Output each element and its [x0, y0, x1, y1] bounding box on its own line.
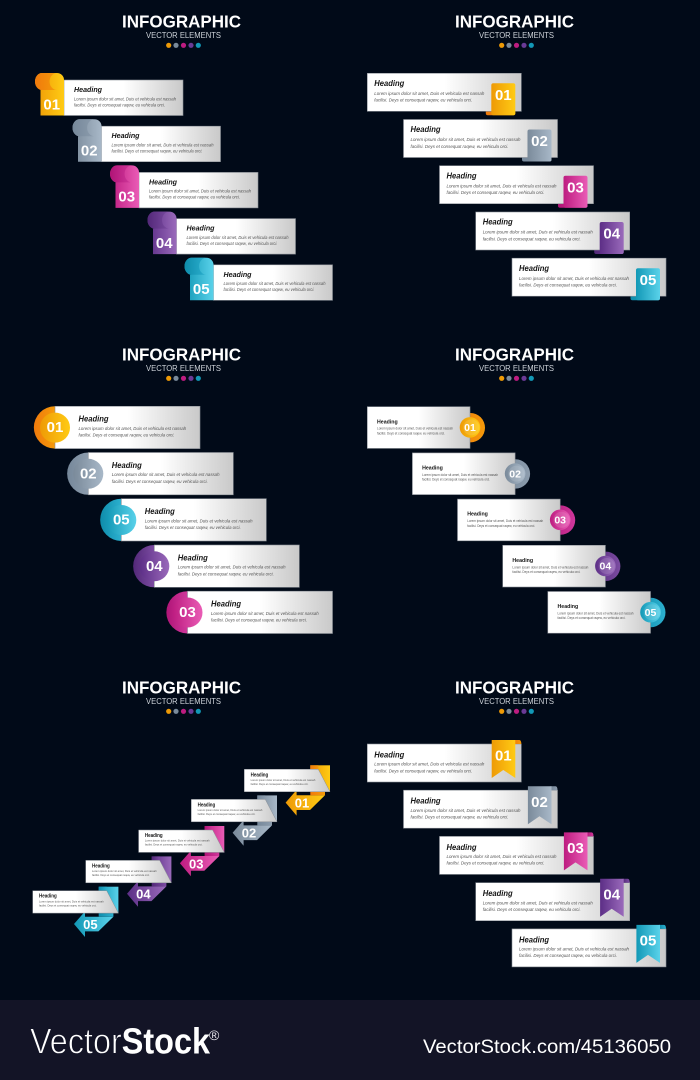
step 05: 05 — [640, 933, 656, 950]
step 05: 05 — [83, 917, 98, 932]
step 01: Lorem ipsum dolor sit amet, Duis et vehicula est nassah — [78, 426, 186, 432]
step 03 — [440, 832, 594, 874]
heading — [455, 12, 574, 40]
step 04 — [148, 212, 296, 254]
step 03 — [166, 591, 332, 634]
step 01: Lorem ipsum dolor sit amet, Duis et vehicula est nassah — [74, 96, 176, 101]
step 03: Heading — [211, 600, 241, 609]
colour dots — [166, 43, 201, 48]
step 03: facilisi. Deys et consequat raqew, eu vehicula orci. — [145, 843, 203, 847]
step 05: 05 — [640, 272, 656, 289]
step 04: facilisi. Deys et consequat raqew, eu vehicula orci. — [186, 241, 278, 246]
step 02 — [67, 452, 233, 495]
step 01: facilisi. Deys et consequat raqew, eu vehicula orci. — [74, 102, 165, 107]
step 01: 01 — [464, 422, 476, 434]
step 04: Heading — [512, 558, 533, 564]
step 01: Lorem ipsum dolor sit amet, Duis et vehicula est nassah — [377, 427, 453, 431]
step 02: facilisi. Deys et consequat raqew, eu vehicula orci. — [112, 148, 202, 153]
step 04: 04 — [603, 226, 621, 243]
step 02: facilisi. Deys et consequat raqew, eu vehicula orci. — [112, 479, 208, 485]
heading — [122, 678, 241, 706]
step 03: Lorem ipsum dolor sit amet, Duis et vehicula est nassah — [467, 519, 543, 523]
step 05: 05 — [193, 281, 210, 298]
step 04: facilisi. Deys et consequat raqew, eu vehicula orci. — [92, 873, 150, 877]
step 05: Heading — [557, 604, 578, 610]
step 01: 01 — [295, 796, 309, 811]
step 02: 02 — [531, 794, 548, 811]
step 04: facilisi. Deys et consequat raqew, eu vehicula orci. — [178, 571, 274, 577]
step 03 — [110, 165, 258, 208]
heading: VECTOR ELEMENTS — [479, 30, 554, 40]
heading: INFOGRAPHIC — [455, 344, 574, 364]
step 03: Lorem ipsum dolor sit amet, Duis et vehicula est nassah — [446, 183, 557, 189]
step 01: Heading — [374, 750, 404, 760]
panel: scroll tabs — [35, 12, 332, 300]
heading — [455, 344, 574, 373]
step 05: Lorem ipsum dolor sit amet, Duis et vehicula est nassah — [557, 612, 634, 616]
step 03: Lorem ipsum dolor sit amet, Duis et vehicula est nassah — [145, 839, 210, 843]
step 04: Heading — [483, 218, 513, 227]
step 02 — [191, 795, 277, 846]
heading: VECTOR ELEMENTS — [479, 363, 554, 373]
step 01: facilisi. Deys et consequat raqew, eu vehicula orci. — [78, 433, 174, 439]
step 04: facilisi. Deys et consequat raqew, eu vehicula orci. — [512, 570, 580, 574]
step 02: Lorem ipsum dolor sit amet, Duis et vehicula est nassah — [410, 808, 521, 814]
step 05: facilisi. Deys et consequat raqew, eu vehicula orci. — [519, 953, 617, 959]
step 04: Lorem ipsum dolor sit amet, Duis et vehicula est nassah — [483, 230, 593, 236]
step 04: facilisi. Deys et consequat raqew, eu vehicula orci. — [483, 907, 581, 913]
step 05: Heading — [519, 264, 549, 273]
step 01: facilisi. Deys et consequat raqew, eu vehicula orci. — [374, 98, 472, 104]
step 05: Heading — [224, 270, 252, 279]
step 01: Lorem ipsum dolor sit amet, Duis et vehicula est nassah — [374, 762, 485, 768]
step 01: 01 — [47, 419, 63, 436]
step 04: Heading — [483, 889, 513, 898]
step 04: 04 — [136, 887, 151, 902]
step 04: Lorem ipsum dolor sit amet, Duis et vehicula est nassah — [186, 235, 289, 240]
step 05: facilisi. Deys et consequat raqew, eu vehicula orci. — [224, 287, 314, 292]
step 01 — [367, 407, 485, 448]
footer band — [0, 1000, 700, 1080]
step 01: Heading — [78, 415, 109, 424]
step 02: Lorem ipsum dolor sit amet, Duis et vehicula est nassah — [112, 472, 220, 478]
panel: ribbon bookmarks — [367, 678, 666, 967]
step 01: Heading — [374, 79, 404, 88]
step 03: facilisi. Deys et consequat raqew, eu vehicula orci. — [446, 861, 544, 867]
step 01: facilisi. Deys et consequat raqew, eu vehicula orci. — [251, 782, 308, 786]
step 01: Lorem ipsum dolor sit amet, Duis et vehicula est nassah — [374, 91, 485, 97]
colour dots — [499, 709, 534, 714]
step 03: facilisi. Deys et consequat raqew, eu vehicula orci. — [211, 618, 307, 624]
step 05: facilisi. Deys et consequat raqew, eu vehicula orci. — [519, 283, 617, 289]
step 05: 05 — [645, 607, 656, 619]
step 02: Lorem ipsum dolor sit amet, Duis et vehicula est nassah — [410, 137, 521, 143]
step 03: 03 — [567, 179, 584, 196]
step 04: Lorem ipsum dolor sit amet, Duis et vehicula est nassah — [92, 869, 157, 873]
step 05: facilisi. Deys et consequat raqew, eu vehicula orci. — [39, 903, 97, 907]
step 03: Lorem ipsum dolor sit amet, Duis et vehicula est nassah — [446, 854, 557, 860]
step 05 — [548, 592, 666, 633]
step 01: 01 — [43, 96, 60, 113]
footer registered mark: ® — [209, 1027, 220, 1043]
step 02: Heading — [410, 125, 441, 134]
panel: round left badges — [34, 344, 332, 634]
heading: INFOGRAPHIC — [122, 678, 241, 698]
step 03: 03 — [118, 189, 135, 206]
step 04 — [476, 879, 630, 921]
step 02: Lorem ipsum dolor sit amet, Duis et vehicula est nassah — [112, 142, 214, 147]
step 03: Heading — [446, 171, 477, 180]
step 01: Heading — [74, 85, 102, 94]
heading: VECTOR ELEMENTS — [146, 696, 221, 706]
step 05: Heading — [145, 507, 175, 516]
step 05: Lorem ipsum dolor sit amet, Duis et vehicula est nassah — [39, 899, 104, 903]
step 03: 03 — [179, 604, 196, 621]
step 03: facilisi. Deys et consequat raqew, eu vehicula orci. — [467, 524, 535, 528]
step 05: Heading — [519, 935, 549, 944]
step 02 — [412, 453, 530, 495]
step 03: Heading — [467, 512, 488, 518]
step 01: facilisi. Deys et consequat raqew, eu vehicula orci. — [374, 768, 472, 774]
step 04: 04 — [156, 235, 173, 252]
step 03 — [139, 826, 224, 876]
step 04 — [503, 545, 620, 587]
step 04 — [86, 856, 171, 907]
step 01 — [367, 73, 521, 115]
step 01: Lorem ipsum dolor sit amet, Duis et vehicula est nassah — [251, 778, 316, 782]
step 02: facilisi. Deys et consequat raqew, eu vehicula orci. — [198, 812, 255, 816]
step 05: 05 — [113, 512, 130, 529]
step 05 — [100, 499, 266, 541]
footer image id: VectorStock.com/45136050 — [423, 1037, 671, 1058]
step 02: Heading — [410, 797, 441, 806]
step 03: 03 — [567, 840, 584, 857]
heading: VECTOR ELEMENTS — [146, 363, 221, 373]
step 01 — [34, 406, 200, 449]
step 04: Lorem ipsum dolor sit amet, Duis et vehicula est nassah — [178, 565, 286, 571]
heading — [122, 344, 241, 373]
step 01: 01 — [495, 748, 512, 765]
step 03: 03 — [554, 515, 566, 527]
step 01 — [244, 765, 330, 816]
step 02: Heading — [112, 131, 140, 140]
step 03: Heading — [446, 843, 477, 852]
step 01: facilisi. Deys et consequat raqew, eu vehicula orci. — [377, 431, 445, 435]
footer logo: VectorStock — [30, 1020, 211, 1062]
step 03: Heading — [145, 833, 163, 839]
step 03: facilisi. Deys et consequat raqew, eu vehicula orci. — [446, 190, 544, 196]
step 04: 04 — [600, 561, 611, 573]
step 03: Heading — [149, 177, 177, 186]
step 04: Lorem ipsum dolor sit amet, Duis et vehicula est nassah — [483, 900, 593, 906]
step 02: facilisi. Deys et consequat raqew, eu vehicula orci. — [410, 144, 508, 150]
step 03: Lorem ipsum dolor sit amet, Duis et vehicula est nassah — [149, 189, 251, 194]
step 02: 02 — [531, 133, 548, 150]
step 02: Heading — [198, 802, 215, 808]
step 05 — [512, 925, 666, 967]
step 05: Lorem ipsum dolor sit amet, Duis et vehicula est nassah — [145, 518, 253, 524]
step 04: 04 — [146, 558, 163, 575]
colour dots — [499, 43, 534, 48]
step 02: Lorem ipsum dolor sit amet, Duis et vehicula est nassah — [198, 808, 263, 812]
panel: round right badges — [367, 344, 666, 633]
heading: INFOGRAPHIC — [122, 12, 241, 32]
panel: arrow staircase — [33, 678, 330, 937]
panel: square tabs — [367, 12, 666, 300]
step 05: Lorem ipsum dolor sit amet, Duis et vehicula est nassah — [519, 276, 629, 282]
step 05 — [512, 258, 666, 300]
heading — [455, 678, 574, 706]
heading: VECTOR ELEMENTS — [146, 30, 221, 40]
heading: INFOGRAPHIC — [455, 678, 574, 698]
step 02: 02 — [242, 826, 256, 841]
step 02: 02 — [509, 468, 521, 480]
step 05: Lorem ipsum dolor sit amet, Duis et vehicula est nassah — [519, 947, 629, 953]
step 01: 01 — [495, 87, 512, 104]
heading: INFOGRAPHIC — [455, 12, 574, 32]
step 02 — [404, 786, 558, 828]
step 02: facilisi. Deys et consequat raqew, eu vehicula orci. — [422, 478, 490, 482]
colour dots — [499, 376, 534, 381]
step 05: facilisi. Deys et consequat raqew, eu vehicula orci. — [145, 525, 241, 531]
heading — [122, 12, 241, 40]
step 05: Heading — [39, 894, 57, 900]
step 03: Lorem ipsum dolor sit amet, Duis et vehicula est nassah — [211, 611, 319, 617]
step 02: 02 — [81, 142, 98, 159]
colour dots — [166, 709, 201, 714]
step 02: 02 — [80, 465, 97, 482]
step 04: 04 — [603, 886, 621, 903]
step 04: facilisi. Deys et consequat raqew, eu vehicula orci. — [483, 236, 581, 242]
step 05 — [184, 258, 332, 300]
step 02 — [72, 119, 220, 162]
step 05: facilisi. Deys et consequat raqew, eu vehicula orci. — [557, 616, 626, 620]
step 02: Heading — [112, 461, 142, 470]
step 04: Lorem ipsum dolor sit amet, Duis et vehicula est nassah — [512, 565, 588, 569]
step 01: Heading — [377, 419, 398, 425]
step 01 — [35, 73, 183, 116]
step 02: facilisi. Deys et consequat raqew, eu vehicula orci. — [410, 815, 508, 821]
step 04: Heading — [186, 224, 215, 233]
step 02 — [404, 120, 558, 162]
step 01 — [367, 740, 521, 782]
step 04: Heading — [178, 553, 208, 562]
heading: INFOGRAPHIC — [122, 344, 241, 364]
step 02: Lorem ipsum dolor sit amet, Duis et vehicula est nassah — [422, 473, 498, 477]
step 05: Lorem ipsum dolor sit amet, Duis et vehicula est nassah — [224, 281, 326, 286]
step 03 — [458, 499, 575, 541]
step 03 — [440, 166, 594, 208]
heading: VECTOR ELEMENTS — [479, 696, 554, 706]
step 04 — [133, 545, 299, 587]
step 04: Heading — [92, 863, 110, 869]
step 03: facilisi. Deys et consequat raqew, eu vehicula orci. — [149, 195, 240, 200]
colour dots — [166, 376, 201, 381]
step 03: 03 — [189, 856, 204, 871]
step 02: Heading — [422, 465, 443, 471]
step 04 — [476, 212, 630, 254]
step 05 — [33, 887, 118, 937]
step 01: Heading — [251, 772, 268, 778]
